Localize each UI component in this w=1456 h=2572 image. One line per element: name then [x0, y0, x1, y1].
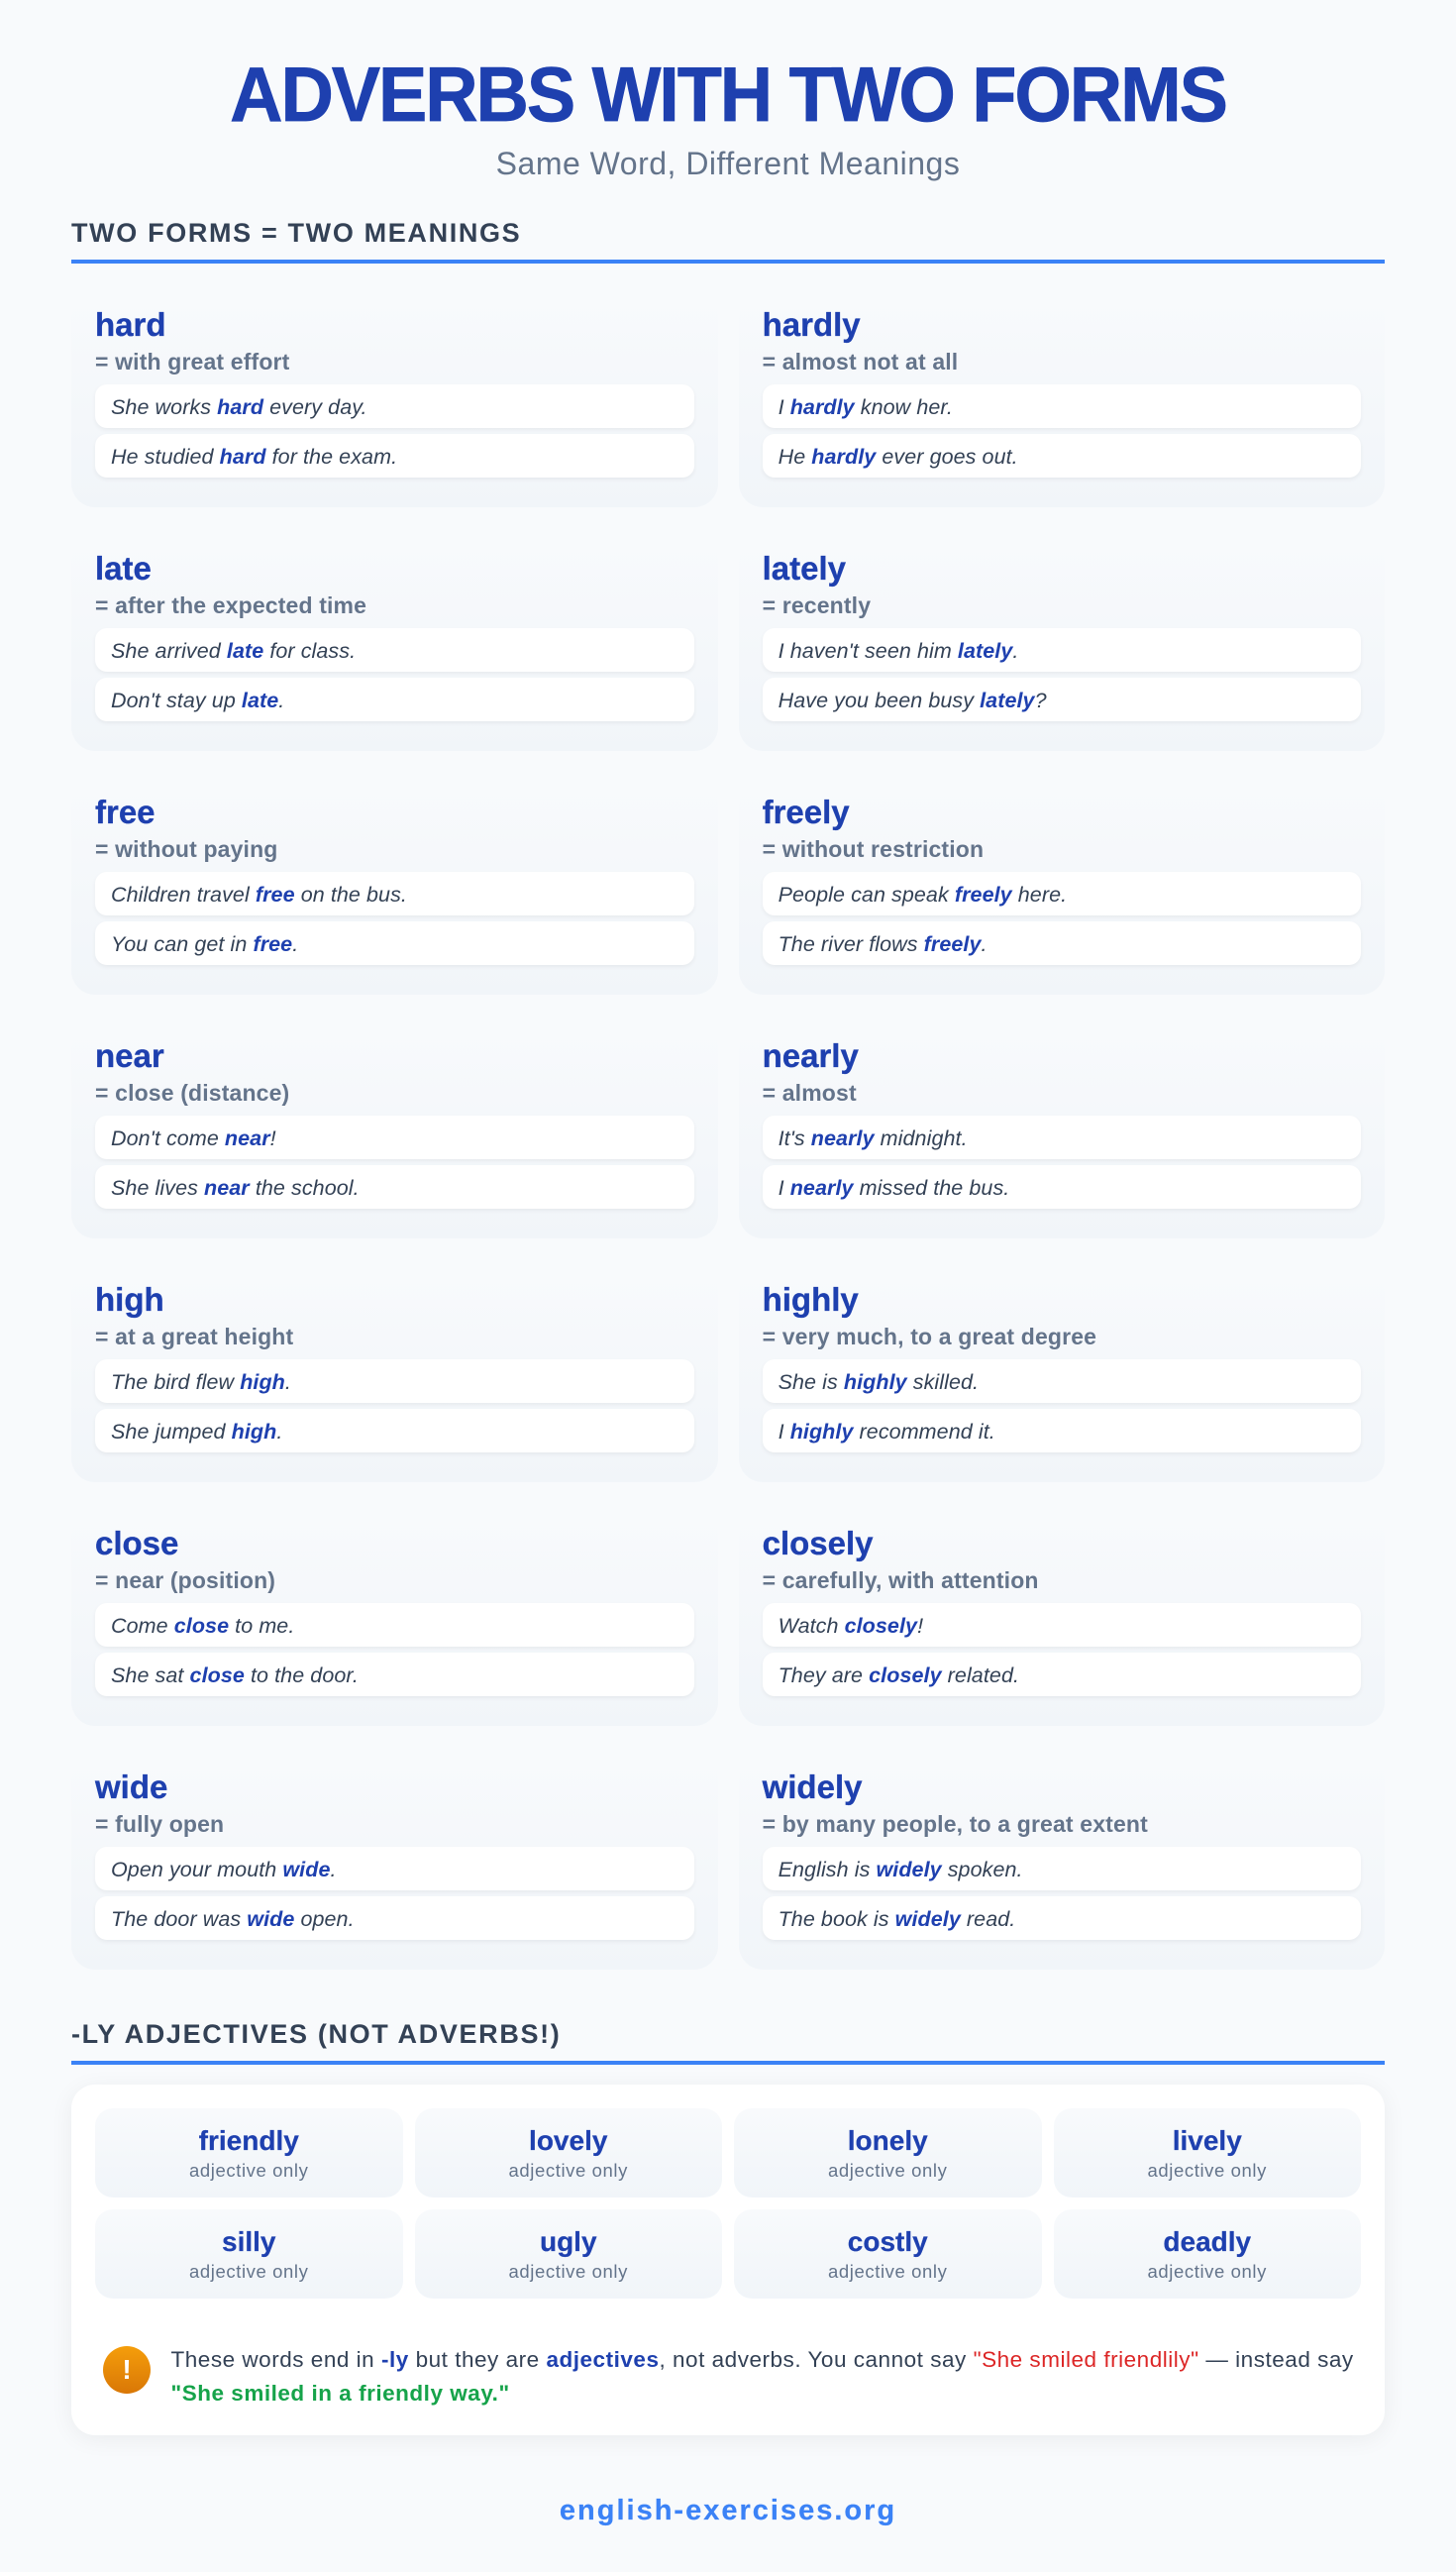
- example: She is highly skilled.: [779, 1370, 979, 1394]
- example: English is widely spoken.: [779, 1858, 1023, 1881]
- meaning: = by many people, to a great extent: [763, 1811, 1148, 1837]
- meaning: = without restriction: [763, 836, 984, 862]
- word: late: [95, 550, 152, 587]
- example: [95, 1116, 694, 1159]
- card: hardly: [739, 293, 1385, 507]
- example: [95, 1653, 694, 1696]
- example: [95, 678, 694, 721]
- section heading: two forms: [71, 226, 1385, 264]
- example: Watch closely!: [779, 1614, 923, 1638]
- meaning: = very much, to a great degree: [763, 1324, 1096, 1349]
- chip: friendly: adjective only: [189, 2160, 309, 2181]
- example: She arrived late for class.: [111, 639, 356, 663]
- example: [763, 1409, 1361, 1452]
- chip: ugly: adjective only: [509, 2261, 628, 2282]
- example: She lives near the school.: [111, 1176, 360, 1200]
- example: She sat close to the door.: [111, 1663, 359, 1687]
- subtitle: Same Word, Different Meanings: [496, 146, 960, 181]
- chip: ugly: [414, 2209, 722, 2299]
- chip: lonely: [734, 2108, 1042, 2197]
- word: near: [95, 1037, 164, 1074]
- example: [95, 1165, 694, 1209]
- example: [763, 921, 1361, 965]
- word: hardly: [763, 306, 861, 343]
- example: Have you been busy lately?: [779, 689, 1047, 712]
- section heading: -ly adjectives: -LY ADJECTIVES (NOT ADVERBS!): [71, 2019, 561, 2049]
- example: [95, 628, 694, 672]
- chip: lively: lively: [1173, 2125, 1242, 2156]
- footer: english-exercises.org: [560, 2495, 896, 2526]
- chip: costly: adjective only: [828, 2261, 947, 2282]
- word: lately: [763, 550, 846, 587]
- word: wide: [95, 1768, 167, 1805]
- card: high: [71, 1268, 718, 1482]
- example: I highly recommend it.: [779, 1420, 995, 1444]
- meaning: = with great effort: [95, 349, 289, 375]
- example: The bird flew high.: [111, 1370, 291, 1394]
- example: Don't come near!: [111, 1126, 276, 1150]
- example: [763, 384, 1361, 428]
- example: [763, 872, 1361, 915]
- icon: warning: [103, 2346, 151, 2394]
- example: I haven't seen him lately.: [779, 639, 1018, 663]
- example: [763, 1847, 1361, 1890]
- example: [763, 678, 1361, 721]
- chip: lonely: lonely: [848, 2125, 928, 2156]
- card: wide: [71, 1756, 718, 1970]
- card: closely: [739, 1512, 1385, 1726]
- icon: warning: !: [122, 2354, 132, 2385]
- card: close: [71, 1512, 718, 1726]
- example: [95, 921, 694, 965]
- example: He studied hard for the exam.: [111, 445, 397, 469]
- panel: -ly adjectives: [71, 2085, 1385, 2435]
- example: The river flows freely.: [779, 932, 988, 956]
- example: [763, 1653, 1361, 1696]
- card: free: [71, 781, 718, 995]
- example: [763, 434, 1361, 478]
- chip: silly: [95, 2209, 402, 2299]
- chip: costly: costly: [848, 2226, 928, 2257]
- card: near: [71, 1024, 718, 1238]
- example: I nearly missed the bus.: [779, 1176, 1009, 1200]
- chip: lively: adjective only: [1147, 2160, 1267, 2181]
- card: lately: [739, 537, 1385, 751]
- card: highly: [739, 1268, 1385, 1482]
- card: widely: [739, 1756, 1385, 1970]
- chip: friendly: [95, 2108, 402, 2197]
- word: close: [95, 1525, 178, 1561]
- example: [763, 1165, 1361, 1209]
- meaning: = after the expected time: [95, 592, 366, 618]
- example: [95, 1603, 694, 1647]
- chip: silly: adjective only: [189, 2261, 309, 2282]
- example: [95, 1896, 694, 1940]
- example: People can speak freely here.: [779, 883, 1067, 907]
- word: freely: [763, 794, 850, 830]
- word: closely: [763, 1525, 874, 1561]
- chip: lively: [1054, 2108, 1361, 2197]
- chip: lovely: adjective only: [509, 2160, 628, 2181]
- chip: deadly: adjective only: [1147, 2261, 1267, 2282]
- example: [95, 1409, 694, 1452]
- word: hard: [95, 306, 166, 343]
- example: She jumped high.: [111, 1420, 282, 1444]
- example: They are closely related.: [779, 1663, 1019, 1687]
- meaning: = almost not at all: [763, 349, 958, 375]
- chip: silly: silly: [222, 2226, 275, 2257]
- card: hard: [71, 293, 718, 507]
- warning note: [170, 2347, 1354, 2406]
- chip: lovely: [414, 2108, 722, 2197]
- section heading: -ly adjectives: [71, 2027, 1385, 2065]
- example: The door was wide open.: [111, 1907, 355, 1931]
- example: [763, 1359, 1361, 1403]
- example: [763, 1896, 1361, 1940]
- meaning: = almost: [763, 1080, 857, 1106]
- example: She works hard every day.: [111, 395, 367, 419]
- meaning: = without paying: [95, 836, 277, 862]
- meaning: = carefully, with attention: [763, 1567, 1039, 1593]
- chip: costly: [734, 2209, 1042, 2299]
- word: high: [95, 1281, 164, 1318]
- meaning: = near (position): [95, 1567, 275, 1593]
- example: [95, 1359, 694, 1403]
- meaning: = at a great height: [95, 1324, 293, 1349]
- meaning: = recently: [763, 592, 871, 618]
- example: He hardly ever goes out.: [779, 445, 1018, 469]
- example: It's nearly midnight.: [779, 1126, 968, 1150]
- chip: deadly: deadly: [1163, 2226, 1251, 2257]
- example: [95, 1847, 694, 1890]
- example: [95, 872, 694, 915]
- example: The book is widely read.: [779, 1907, 1015, 1931]
- word: highly: [763, 1281, 859, 1318]
- warning note: "She smiled in a friendly way.": [170, 2381, 510, 2406]
- section heading: two forms: TWO FORMS = TWO MEANINGS: [71, 218, 521, 248]
- meaning: = close (distance): [95, 1080, 289, 1106]
- example: Open your mouth wide.: [111, 1858, 337, 1881]
- card: freely: [739, 781, 1385, 995]
- word: widely: [763, 1768, 862, 1805]
- card: late: [71, 537, 718, 751]
- example: I hardly know her.: [779, 395, 953, 419]
- example: You can get in free.: [111, 932, 298, 956]
- example: [763, 628, 1361, 672]
- example: [95, 434, 694, 478]
- word: nearly: [763, 1037, 859, 1074]
- example: Children travel free on the bus.: [111, 883, 407, 907]
- example: [763, 1603, 1361, 1647]
- example: Come close to me.: [111, 1614, 294, 1638]
- chip: friendly: friendly: [199, 2125, 299, 2156]
- chip: ugly: ugly: [540, 2226, 597, 2257]
- meaning: = fully open: [95, 1811, 224, 1837]
- card: nearly: [739, 1024, 1385, 1238]
- chip: deadly: [1054, 2209, 1361, 2299]
- example: [95, 384, 694, 428]
- example: Don't stay up late.: [111, 689, 284, 712]
- example: [763, 1116, 1361, 1159]
- warning note: These words end in -ly but they are adjectives, not adverbs. You cannot say "She smiled friendlily" — instead say: [170, 2347, 1354, 2372]
- chip: lovely: lovely: [529, 2125, 607, 2156]
- title: ADVERBS WITH TWO FORMS: [230, 51, 1226, 138]
- word: free: [95, 794, 156, 830]
- chip: lonely: adjective only: [828, 2160, 947, 2181]
